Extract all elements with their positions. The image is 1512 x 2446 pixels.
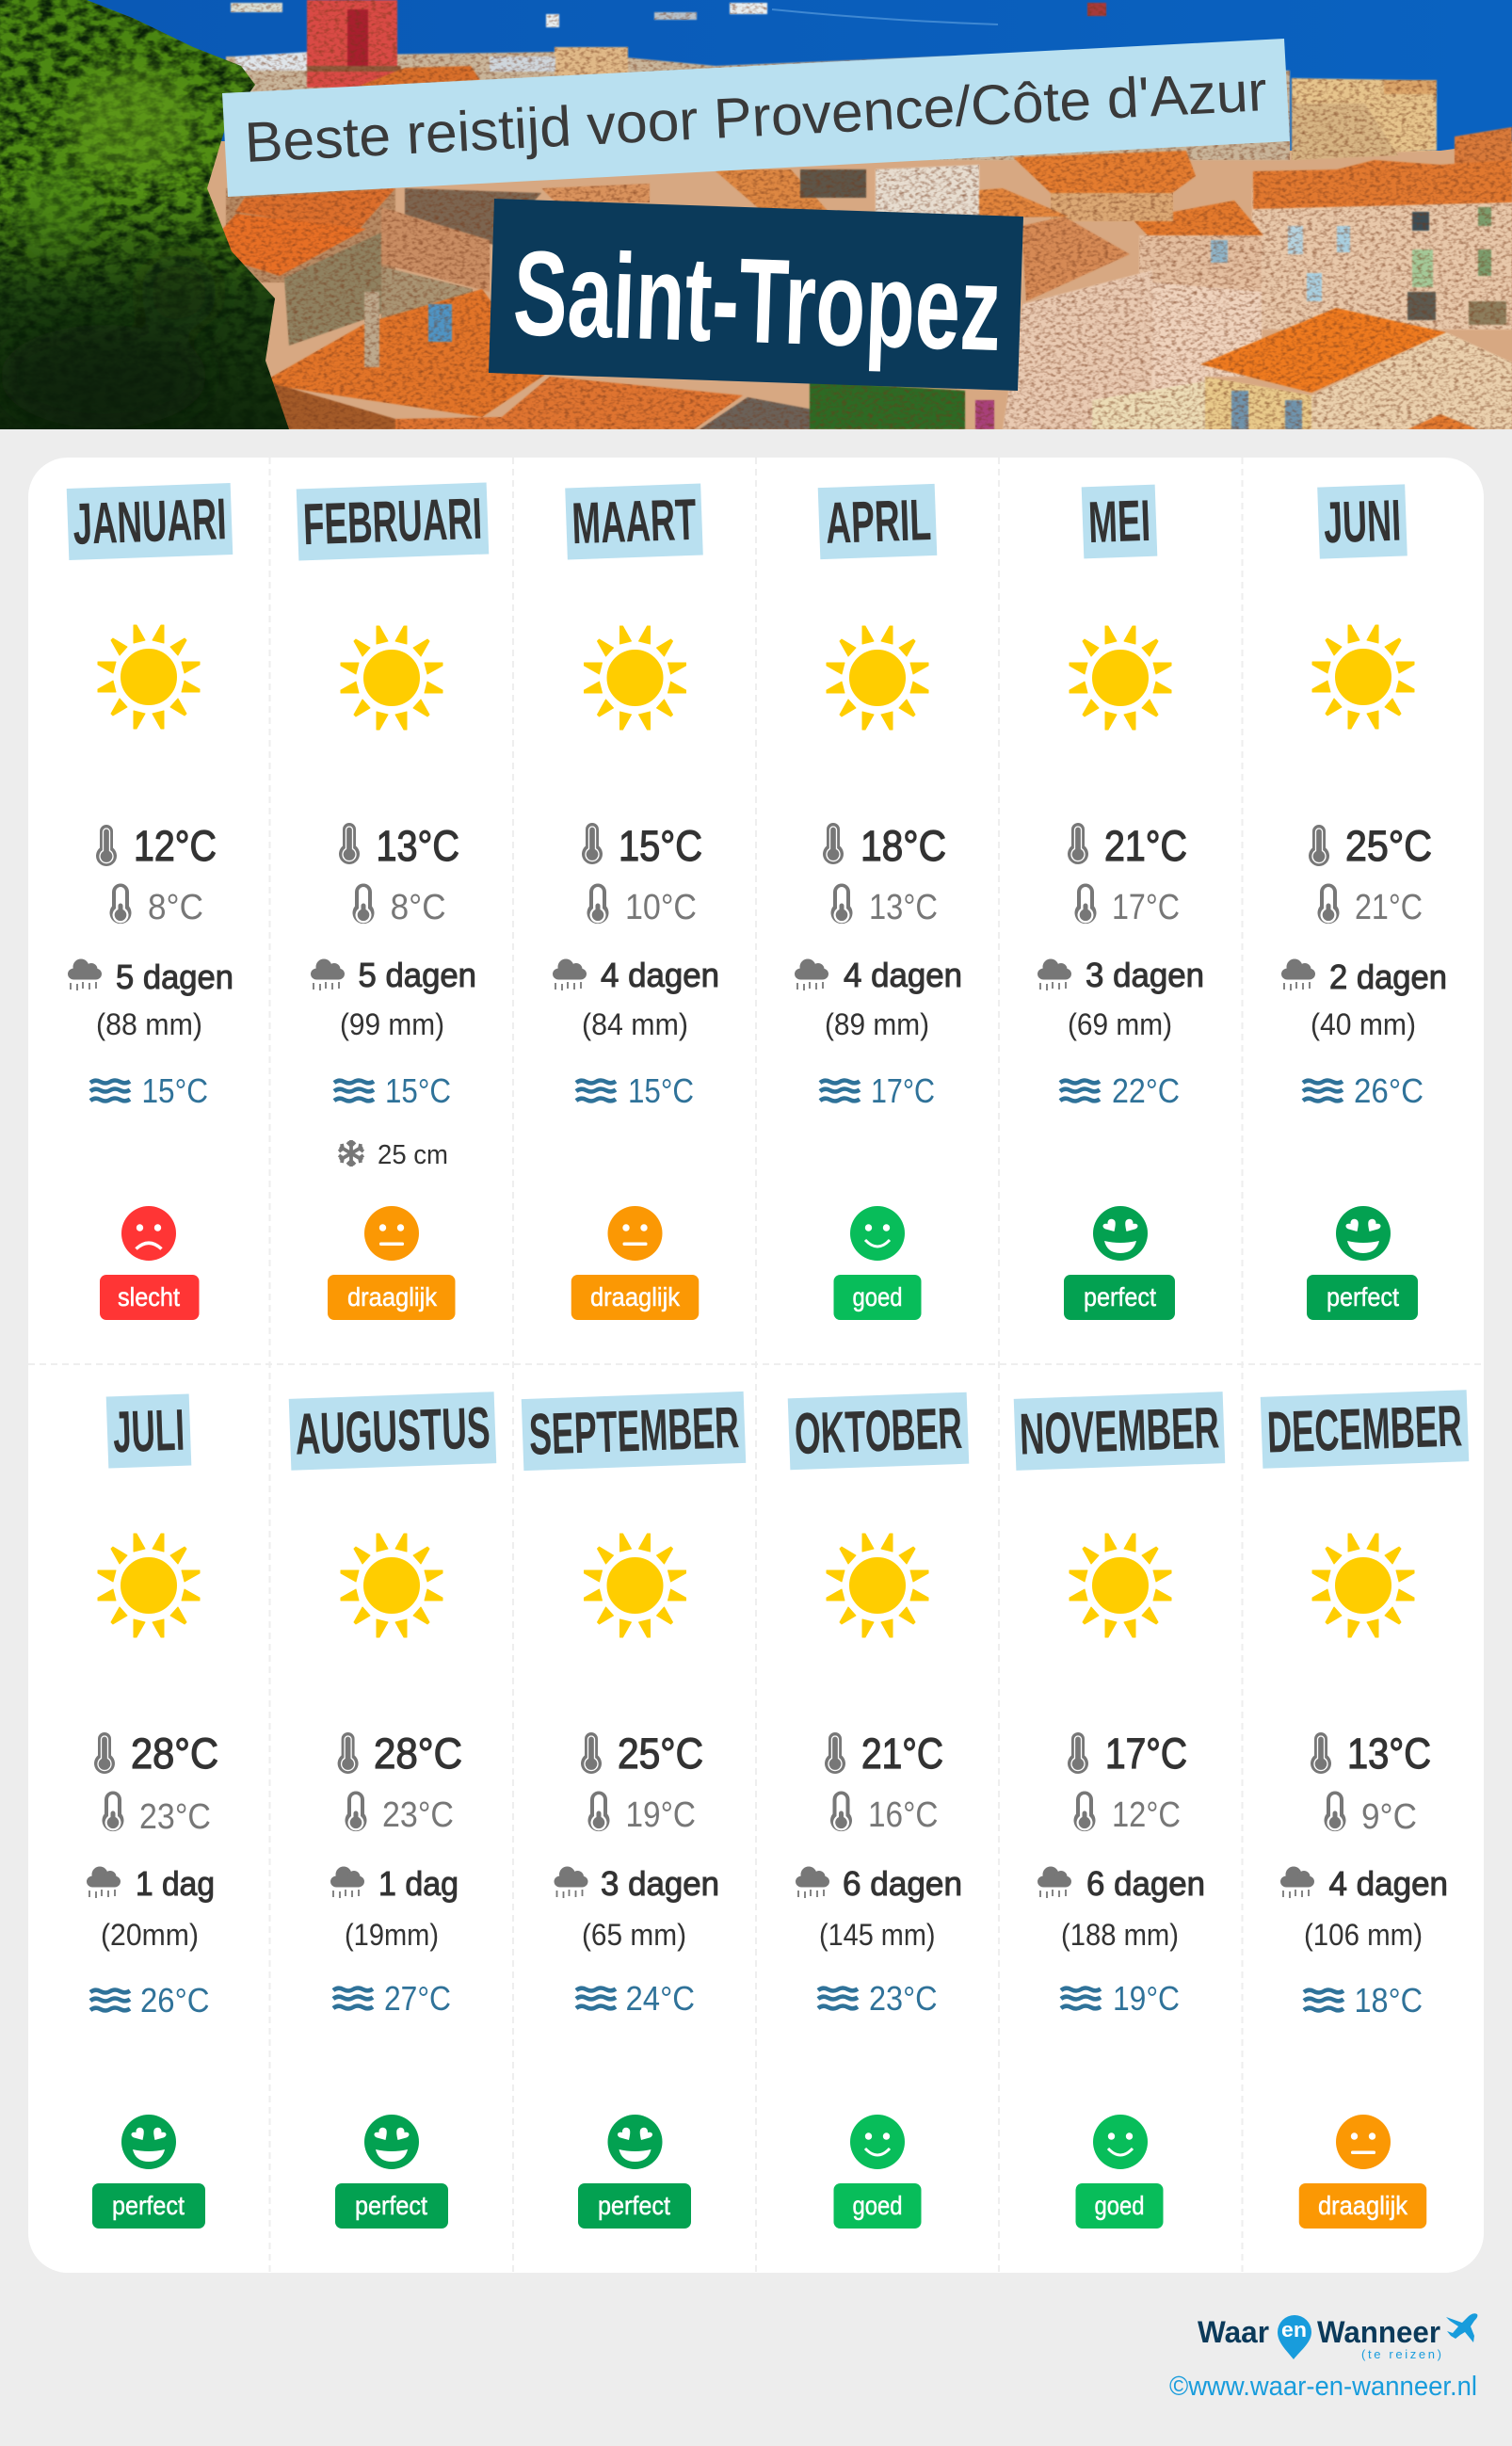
high temperature: 25°C — [1345, 822, 1432, 870]
high temperature — [1068, 822, 1187, 870]
title banner: Saint-Tropez: Saint-Tropez — [511, 226, 1004, 377]
rating: perfect: perfect — [1327, 1282, 1399, 1312]
sea temperature: 17°C — [871, 1071, 935, 1110]
rain days: 1 dag — [136, 1864, 215, 1903]
high temperature — [825, 1730, 943, 1778]
sea temperature: 23°C — [869, 1979, 938, 2018]
high temperature: 21°C — [861, 1730, 943, 1778]
banner: Beste reistijd voor Provence/Côte d'Azur: Beste reistijd voor Provence/Côte d'Azur — [243, 59, 1268, 174]
high temperature: 25°C — [618, 1730, 703, 1778]
rating: goed: goed — [853, 2191, 902, 2220]
rating: perfect — [92, 2115, 205, 2229]
rating: perfect: perfect — [1084, 1282, 1156, 1312]
rain days — [68, 957, 233, 996]
logo: Waar en Wanneer: Wanneer — [1317, 2315, 1440, 2349]
sea temperature — [576, 1979, 695, 2018]
low temperature: 9°C — [1361, 1797, 1417, 1837]
heading: juni: JUNI — [1323, 489, 1402, 555]
rating: perfect — [1307, 1206, 1418, 1320]
rating: draaglijk: draaglijk — [1318, 2191, 1408, 2220]
logo: Waar en Wanneer: Waar — [1198, 2315, 1269, 2349]
sea temperature — [818, 1979, 938, 2018]
month: mei — [1037, 485, 1204, 1320]
rainfall: (88 mm) — [96, 1007, 202, 1041]
rain days — [1037, 956, 1204, 994]
high temperature — [1068, 1730, 1187, 1778]
icon: sun — [341, 626, 442, 730]
rating: draaglijk — [1299, 2115, 1426, 2229]
heading: september — [522, 1392, 746, 1471]
low temperature: 12°C — [1112, 1795, 1181, 1835]
sea temperature: 24°C — [625, 1979, 695, 2018]
month: juni — [1281, 484, 1447, 1320]
rain days — [1280, 1864, 1448, 1903]
month: juli — [87, 1393, 218, 2229]
title banner: Saint-Tropez — [489, 199, 1023, 391]
high temperature — [338, 1730, 462, 1778]
icon: sun — [584, 626, 685, 730]
rain days — [1281, 957, 1447, 996]
sea temperature: 22°C — [1112, 1071, 1180, 1110]
sea temperature: 26°C — [140, 1981, 209, 2020]
month: september — [522, 1392, 746, 2229]
heading: maart — [565, 484, 703, 559]
shoreline — [226, 52, 1290, 160]
logo: Waar en Wanneer: en — [1281, 2318, 1307, 2341]
rain days: 4 dagen — [601, 956, 719, 994]
low temperature — [352, 883, 446, 927]
heading: november: NOVEMBER — [1019, 1395, 1220, 1468]
rain days: 5 dagen — [116, 957, 233, 996]
rain days: 6 dagen — [843, 1864, 962, 1903]
low temperature: 8°C — [148, 888, 203, 927]
rating: draaglijk: draaglijk — [347, 1282, 438, 1312]
icon: sun — [341, 1534, 442, 1637]
snow depth — [339, 1140, 448, 1170]
high temperature — [1311, 1730, 1431, 1778]
low temperature — [830, 883, 938, 927]
icon: sun — [1312, 1534, 1414, 1637]
low temperature — [1073, 1791, 1181, 1835]
sea temperature — [1061, 1979, 1180, 2018]
rain days — [311, 956, 476, 994]
high temperature: 28°C — [131, 1730, 218, 1778]
high temperature — [96, 822, 217, 870]
icon: sun — [1312, 625, 1414, 729]
heading: juni — [1317, 484, 1407, 559]
heading: maart: MAART — [571, 488, 698, 556]
low temperature — [1324, 1791, 1417, 1837]
rainfall: (19mm) — [345, 1918, 439, 1952]
rain days — [1037, 1864, 1205, 1903]
month: oktober — [788, 1392, 969, 2229]
rain days: 3 dagen — [1086, 956, 1204, 994]
rating: perfect: perfect — [112, 2191, 185, 2220]
rainfall: (145 mm) — [819, 1918, 936, 1952]
high temperature: 21°C — [1104, 822, 1187, 870]
rain days: 4 dagen — [1329, 1864, 1448, 1903]
rain days: 6 dagen — [1086, 1864, 1205, 1903]
high temperature: 17°C — [1105, 1730, 1187, 1778]
sea temperature — [333, 1979, 451, 2018]
icon: sun — [98, 1534, 200, 1637]
icon: sun — [1070, 1534, 1171, 1637]
heading: mei — [1082, 485, 1157, 558]
rating: perfect — [1064, 1206, 1175, 1320]
high temperature: 13°C — [377, 822, 459, 870]
low temperature: 19°C — [625, 1795, 696, 1835]
rating: slecht: slecht — [118, 1282, 180, 1312]
sea temperature: 15°C — [141, 1071, 208, 1110]
website credit: ©www.waar-en-wanneer.nl — [1169, 2372, 1477, 2402]
sea temperature — [1304, 1981, 1423, 2020]
icon: sun — [584, 1534, 685, 1637]
month: april — [795, 484, 962, 1320]
high temperature: 13°C — [1347, 1730, 1431, 1778]
high temperature: 28°C — [374, 1730, 462, 1778]
rating: draaglijk — [328, 1206, 456, 1320]
high temperature — [582, 822, 702, 870]
low temperature: 13°C — [869, 888, 938, 927]
rain days: 1 dag — [378, 1864, 458, 1903]
heading: februari — [297, 482, 489, 561]
rating: draaglijk — [571, 1206, 699, 1320]
sea temperature — [90, 1071, 208, 1110]
rating: perfect: perfect — [355, 2191, 427, 2220]
low temperature: 23°C — [139, 1797, 211, 1837]
sea temperature: 15°C — [628, 1071, 694, 1110]
rating: goed — [1075, 2115, 1164, 2229]
rainfall: (188 mm) — [1061, 1918, 1179, 1952]
month: november — [1014, 1392, 1225, 2229]
logo: Waar en Wanneer: (te reizen) — [1361, 2347, 1441, 2361]
high temperature — [339, 822, 459, 870]
high temperature: 12°C — [134, 822, 217, 870]
rating: slecht — [100, 1206, 200, 1320]
heading: juli: JULI — [112, 1398, 185, 1465]
logo: Waar en Wanneer — [1198, 2313, 1477, 2361]
rain days — [795, 956, 962, 994]
rating: goed: goed — [1094, 2191, 1145, 2220]
low temperature: 8°C — [391, 888, 446, 927]
snow depth: 25 cm — [378, 1140, 448, 1170]
rating: goed — [834, 1206, 921, 1320]
rainfall: (106 mm) — [1304, 1918, 1423, 1952]
heading: november — [1014, 1392, 1225, 1471]
heading: augustus — [289, 1392, 496, 1471]
rating: perfect: perfect — [598, 2191, 670, 2220]
right building block — [1252, 188, 1512, 330]
rain days — [87, 1864, 215, 1903]
sea temperature: 19°C — [1113, 1979, 1180, 2018]
heading: april — [818, 484, 937, 559]
low temperature: 21°C — [1355, 888, 1423, 927]
rainfall: (20mm) — [101, 1918, 199, 1952]
icon: sun — [1070, 626, 1171, 730]
sea temperature: 26°C — [1354, 1071, 1424, 1110]
low temperature — [587, 883, 697, 927]
low temperature — [587, 1791, 696, 1835]
sea temperature: 27°C — [384, 1979, 451, 2018]
icon: sun — [827, 1534, 928, 1637]
high temperature — [581, 1730, 703, 1778]
sea temperature — [820, 1071, 935, 1110]
low temperature: 10°C — [625, 888, 697, 927]
rain days: 3 dagen — [601, 1864, 719, 1903]
rating: perfect — [335, 2115, 448, 2229]
tower — [307, 0, 397, 88]
icon: sun — [827, 626, 928, 730]
high temperature — [94, 1730, 218, 1778]
icon: sun — [98, 625, 200, 729]
high temperature — [823, 822, 946, 870]
low temperature — [1318, 883, 1423, 927]
sea temperature: 15°C — [385, 1071, 451, 1110]
low temperature — [1075, 883, 1180, 927]
heading: mei: MEI — [1087, 489, 1151, 555]
heading: januari — [67, 483, 233, 560]
rainfall: (40 mm) — [1311, 1007, 1416, 1041]
sea temperature — [90, 1981, 209, 2020]
panel: monthly climate table — [28, 458, 1484, 2273]
month: december — [1261, 1390, 1469, 2229]
month: februari — [297, 482, 489, 1320]
heading: oktober: OKTOBER — [794, 1396, 963, 1467]
high temperature — [1309, 822, 1432, 870]
left roofs and walls — [226, 188, 395, 282]
sea temperature — [334, 1071, 451, 1110]
heading: juli — [106, 1393, 191, 1469]
high temperature: 15°C — [619, 822, 702, 870]
rainfall: (65 mm) — [582, 1918, 686, 1952]
low temperature: 17°C — [1112, 888, 1180, 927]
heading: oktober — [788, 1392, 969, 1470]
rainfall: (69 mm) — [1068, 1007, 1172, 1041]
rating: goed: goed — [853, 1282, 902, 1312]
rain days — [330, 1864, 458, 1903]
sea temperature — [1303, 1071, 1424, 1110]
rating: goed — [834, 2115, 921, 2229]
low temperature: 23°C — [382, 1795, 454, 1835]
lower right house — [1092, 381, 1205, 429]
sea temperature: 18°C — [1354, 1981, 1423, 2020]
low temperature — [102, 1791, 211, 1837]
heading: februari: FEBRUARI — [302, 487, 483, 557]
low temperature — [830, 1791, 938, 1835]
rainfall: (99 mm) — [340, 1007, 444, 1041]
rain days: 2 dagen — [1329, 957, 1447, 996]
low temperature — [345, 1791, 454, 1835]
low temperature: 16°C — [868, 1795, 938, 1835]
upper right sand buildings — [1292, 78, 1437, 155]
month: augustus — [289, 1392, 496, 2229]
banner: Beste reistijd voor Provence/Côte d'Azur — [222, 39, 1290, 197]
month: maart — [553, 484, 719, 1320]
heading: april: APRIL — [825, 488, 932, 556]
month: januari — [67, 483, 233, 1320]
sea temperature — [1060, 1071, 1180, 1110]
hero photo: Saint-Tropez rooftops and sea — [0, 0, 1512, 429]
rain days — [553, 956, 719, 994]
heading: september: SEPTEMBER — [528, 1395, 740, 1468]
rain days: 4 dagen — [844, 956, 962, 994]
foliage — [0, 0, 289, 429]
rating: draaglijk: draaglijk — [590, 1282, 681, 1312]
sea temperature — [576, 1071, 694, 1110]
high temperature: 18°C — [861, 822, 946, 870]
low temperature — [109, 883, 203, 927]
heading: augustus: AUGUSTUS — [294, 1395, 491, 1468]
rating: perfect — [578, 2115, 691, 2229]
rainfall: (84 mm) — [582, 1007, 688, 1041]
heading: januari: JANUARI — [72, 487, 228, 557]
rain days: 5 dagen — [358, 956, 476, 994]
rainfall: (89 mm) — [825, 1007, 929, 1041]
middle buildings — [1133, 201, 1263, 235]
